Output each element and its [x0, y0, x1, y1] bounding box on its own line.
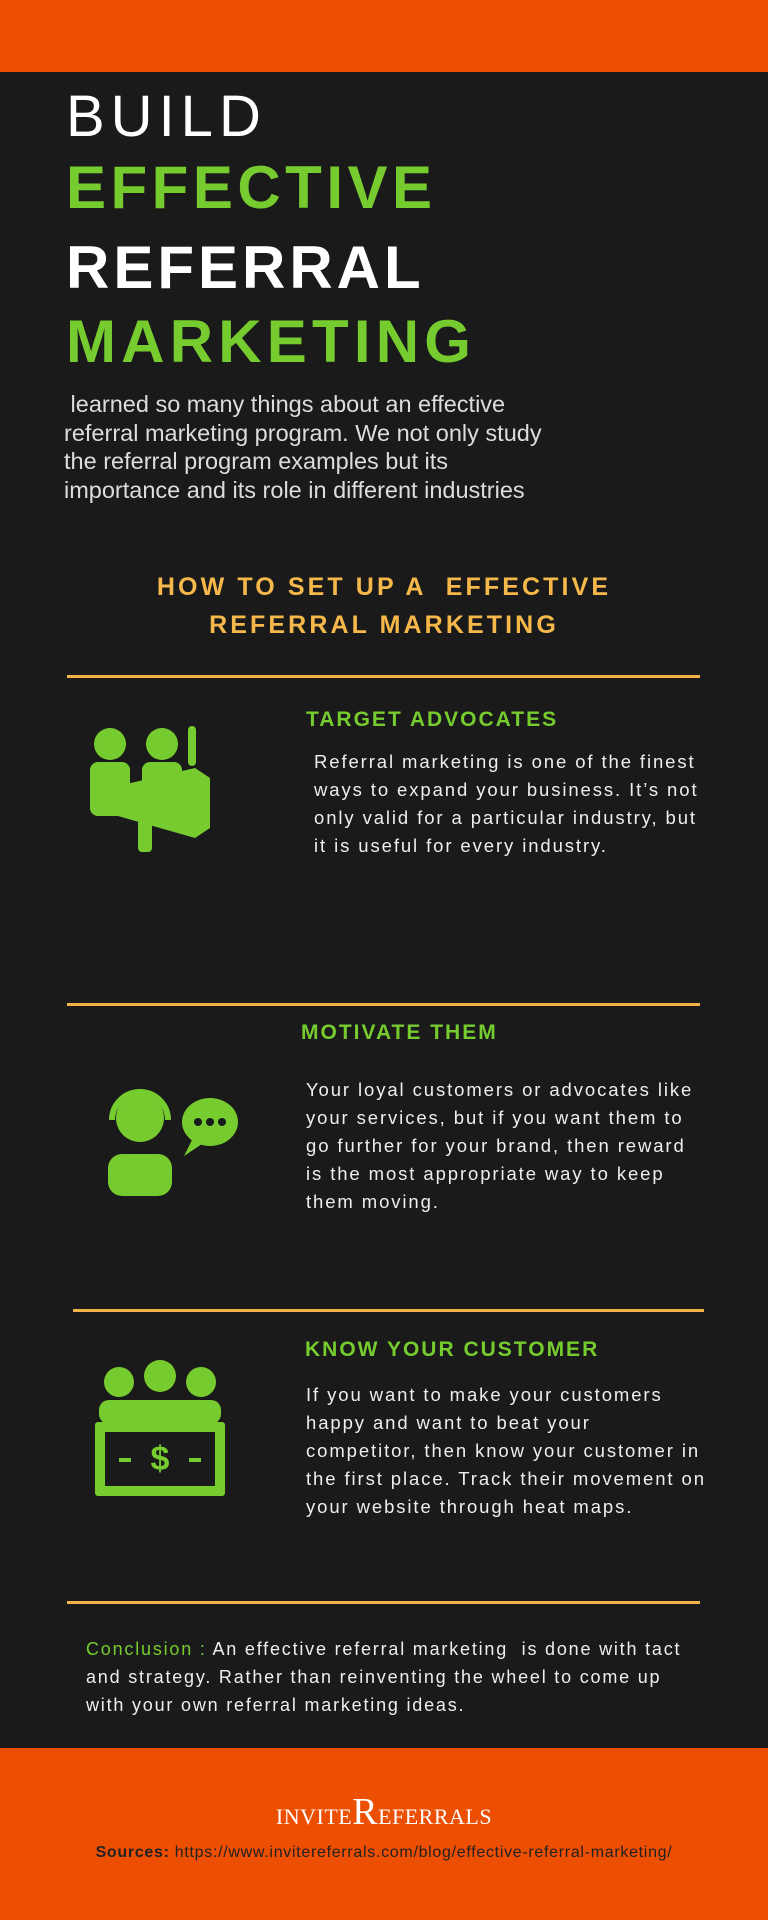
text: them moving.: [306, 1191, 440, 1212]
text: the first place. Track their movement on: [306, 1468, 706, 1489]
section heading: REFERRAL MARKETING: [209, 611, 559, 639]
text: your website through heat maps.: [306, 1496, 633, 1517]
conclusion: and strategy. Rather than reinventing the wheel to come up: [86, 1667, 661, 1687]
conclusion: with your own referral marketing ideas.: [86, 1695, 465, 1715]
text: go further for your brand, then reward: [306, 1135, 686, 1156]
icon: people with money: $: [151, 1440, 170, 1478]
title: BUILD: [66, 84, 267, 149]
intro text: the referral program examples but its: [64, 448, 448, 474]
logo: INVITEREFERRALS: [276, 1791, 492, 1833]
text: ways to expand your business. It’s not: [314, 779, 698, 800]
text: Referral marketing is one of the finest: [314, 751, 696, 772]
top bar: [0, 0, 768, 72]
section heading: [157, 573, 611, 639]
panel: target advocates: [90, 708, 698, 856]
icon: advocates with megaphone: [90, 726, 210, 852]
text: it is useful for every industry.: [314, 835, 608, 856]
conclusion: Conclusion : An effective referral marketing is done with tact: [86, 1639, 681, 1659]
heading: KNOW YOUR CUSTOMER: [305, 1338, 599, 1361]
heading: TARGET ADVOCATES: [306, 708, 558, 731]
text: only valid for a particular industry, but: [314, 807, 697, 828]
text: is the most appropriate way to keep: [306, 1163, 665, 1184]
intro text: referral marketing program. We not only study: [64, 420, 542, 446]
intro text: importance and its role in different industries: [64, 476, 525, 502]
text: If you want to make your customers: [306, 1384, 663, 1405]
intro text: learned so many things about an effective: [71, 391, 505, 417]
text: competitor, then know your customer in: [306, 1440, 700, 1461]
icon: support agent with chat bubble: [108, 1089, 238, 1196]
section heading: HOW TO SET UP A EFFECTIVE: [157, 573, 611, 601]
text: [306, 1079, 693, 1212]
conclusion: [86, 1639, 681, 1715]
text: happy and want to beat your: [306, 1412, 591, 1433]
title: [66, 84, 476, 375]
title: MARKETING: [66, 308, 476, 375]
text: your services, but if you want them to: [306, 1107, 684, 1128]
text: [314, 751, 698, 856]
sources: Sources: https://www.invitereferrals.com/blog/effective-referral-marketing/: [96, 1844, 672, 1861]
panel: motivate them: [108, 1021, 693, 1212]
panel: know your customer: [95, 1338, 706, 1517]
text: Your loyal customers or advocates like: [306, 1079, 693, 1100]
text: [306, 1384, 706, 1517]
icon: people with money: [95, 1360, 225, 1496]
title: REFERRAL: [66, 234, 425, 301]
title: EFFECTIVE: [66, 154, 437, 221]
intro text: [64, 391, 542, 503]
footer: [0, 1748, 768, 1920]
heading: MOTIVATE THEM: [301, 1021, 498, 1044]
